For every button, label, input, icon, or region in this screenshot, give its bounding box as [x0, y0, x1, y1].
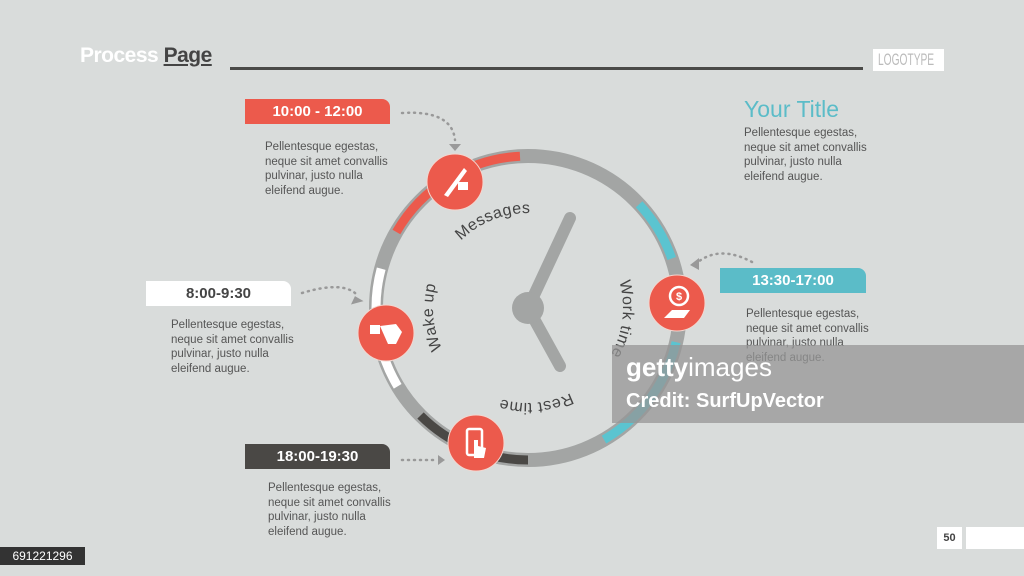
text: 8-9:30 — [171, 319, 294, 375]
icon glyphs — [370, 168, 690, 458]
page number: 50 — [943, 532, 956, 544]
text: 8-9:30: pulvinar, justo nulla — [171, 348, 269, 360]
text: 10-12: Pellentesque egestas, — [265, 141, 378, 153]
title block: Your Title: pulvinar, justo nulla — [744, 156, 842, 168]
text: 13:30-17 — [746, 308, 869, 364]
curved labels: Wake up — [422, 284, 441, 353]
text: 13:30-17: neque sit amet convallis — [746, 323, 869, 335]
watermark box: gettyimages — [626, 352, 772, 382]
text: 10-12 — [265, 141, 388, 197]
label: 18:00-19:30 — [245, 444, 390, 469]
title: Process Page — [80, 44, 212, 67]
icon circles — [358, 154, 705, 471]
label: 13:30-17:00: 13:30-17:00 — [752, 272, 834, 289]
clock hands — [528, 218, 570, 366]
dotted arrows — [302, 113, 752, 460]
curved labels: Messages — [454, 204, 530, 240]
arc: cyan lower — [604, 342, 676, 440]
ring — [376, 156, 680, 460]
arc: white — [376, 269, 398, 386]
title block: Your Title: Pellentesque egestas, — [744, 127, 857, 139]
text: 8-9:30: Pellentesque egestas, — [171, 319, 284, 331]
icon glyphs: $ — [676, 291, 682, 303]
text: 18-19:30 — [268, 482, 391, 538]
curved labels: Work time — [612, 279, 634, 356]
label: 8:00-9:30 — [146, 281, 291, 306]
curved labels: Rest time — [500, 394, 574, 414]
text: 13:30-17: pulvinar, justo nulla — [746, 337, 844, 349]
page number bar — [966, 527, 1024, 549]
label: 10:00 - 12:00 — [245, 99, 390, 124]
label: 13:30-17:00 — [720, 268, 866, 293]
text: 10-12: pulvinar, justo nulla — [265, 170, 363, 182]
text: 13:30-17: Pellentesque egestas, — [746, 308, 859, 320]
label: 18:00-19:30: 18:00-19:30 — [277, 448, 358, 465]
arc: red — [396, 156, 520, 232]
curved labels — [422, 204, 634, 414]
text: 10-12: eleifend augue. — [265, 185, 344, 197]
logotype: LOGOTYPE — [878, 50, 934, 69]
arc: cyan upper — [639, 204, 672, 258]
text: 8-9:30: neque sit amet convallis — [171, 334, 294, 346]
text: 18-19:30: neque sit amet convallis — [268, 497, 391, 509]
watermark box — [612, 345, 1024, 423]
title block: Your Title — [744, 96, 867, 183]
text: 18-19:30: Pellentesque egestas, — [268, 482, 381, 494]
title block: Your Title: eleifend augue. — [744, 171, 823, 183]
watermark box: Credit: SurfUpVector — [626, 390, 824, 412]
text: 18-19:30: pulvinar, justo nulla — [268, 511, 366, 523]
arc: dark — [420, 416, 528, 460]
text: 18-19:30: eleifend augue. — [268, 526, 347, 538]
text: 13:30-17: eleifend augue. — [746, 352, 825, 364]
title block: Your Title: neque sit amet convallis — [744, 142, 867, 154]
label: 8:00-9:30: 8:00-9:30 — [186, 285, 251, 302]
text: 8-9:30: eleifend augue. — [171, 363, 250, 375]
title block: Your Title: Your Title — [744, 96, 839, 122]
page number — [937, 527, 962, 549]
id box — [0, 547, 85, 565]
logotype — [873, 49, 944, 71]
text: 10-12: neque sit amet convallis — [265, 156, 388, 168]
header rule — [230, 67, 863, 70]
id box: 691221296 — [12, 549, 73, 563]
label: 10:00 - 12:00: 10:00 - 12:00 — [272, 103, 363, 120]
